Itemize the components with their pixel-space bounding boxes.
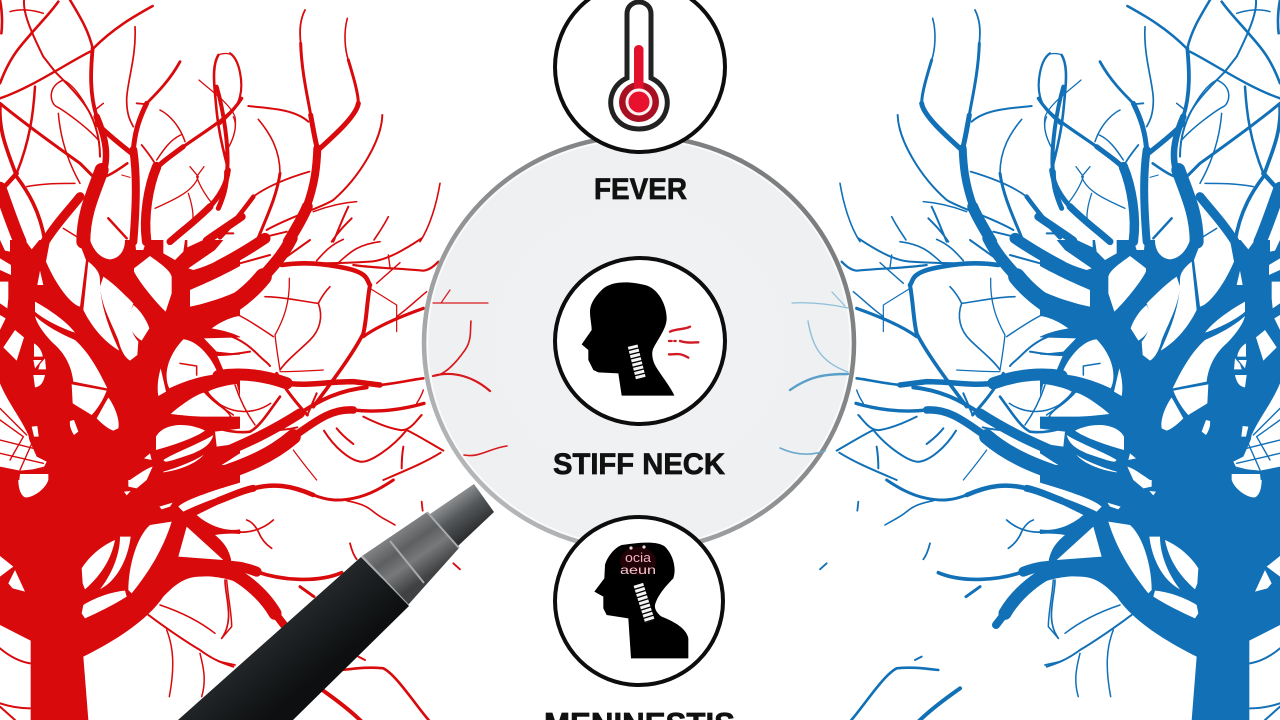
blue vascular tree [820,0,1280,720]
icon: meningitis badge [555,517,723,685]
magnified blue vessels [780,292,848,454]
thermometer bulb [619,82,659,122]
spine [633,346,641,379]
badge circle [555,0,725,152]
badge circle [555,258,725,424]
lens [424,136,854,550]
handle ferrule [362,512,459,605]
thermometer centre [627,90,651,114]
heading: fever: FEVER [594,173,687,206]
red vascular tree [0,0,460,720]
handle grip [178,557,409,720]
infection marks [620,545,656,577]
badge circle [555,517,723,685]
lens inner edge [428,140,850,546]
handle neck [430,484,494,546]
thermometer outline [611,2,667,129]
head silhouette [594,543,688,658]
infection marks: aeun [620,563,656,577]
spine [638,584,650,622]
thermometer column [634,45,644,95]
magnifying glass [178,136,854,720]
neck pain marks [669,327,698,358]
infection marks: ocia [625,550,652,565]
magnified red vessels [433,290,507,456]
icon: stiff neck badge [555,258,725,424]
heading: stiff neck: STIFF NECK [553,448,725,481]
head silhouette [582,282,674,396]
icon: fever thermometer badge [555,0,725,152]
